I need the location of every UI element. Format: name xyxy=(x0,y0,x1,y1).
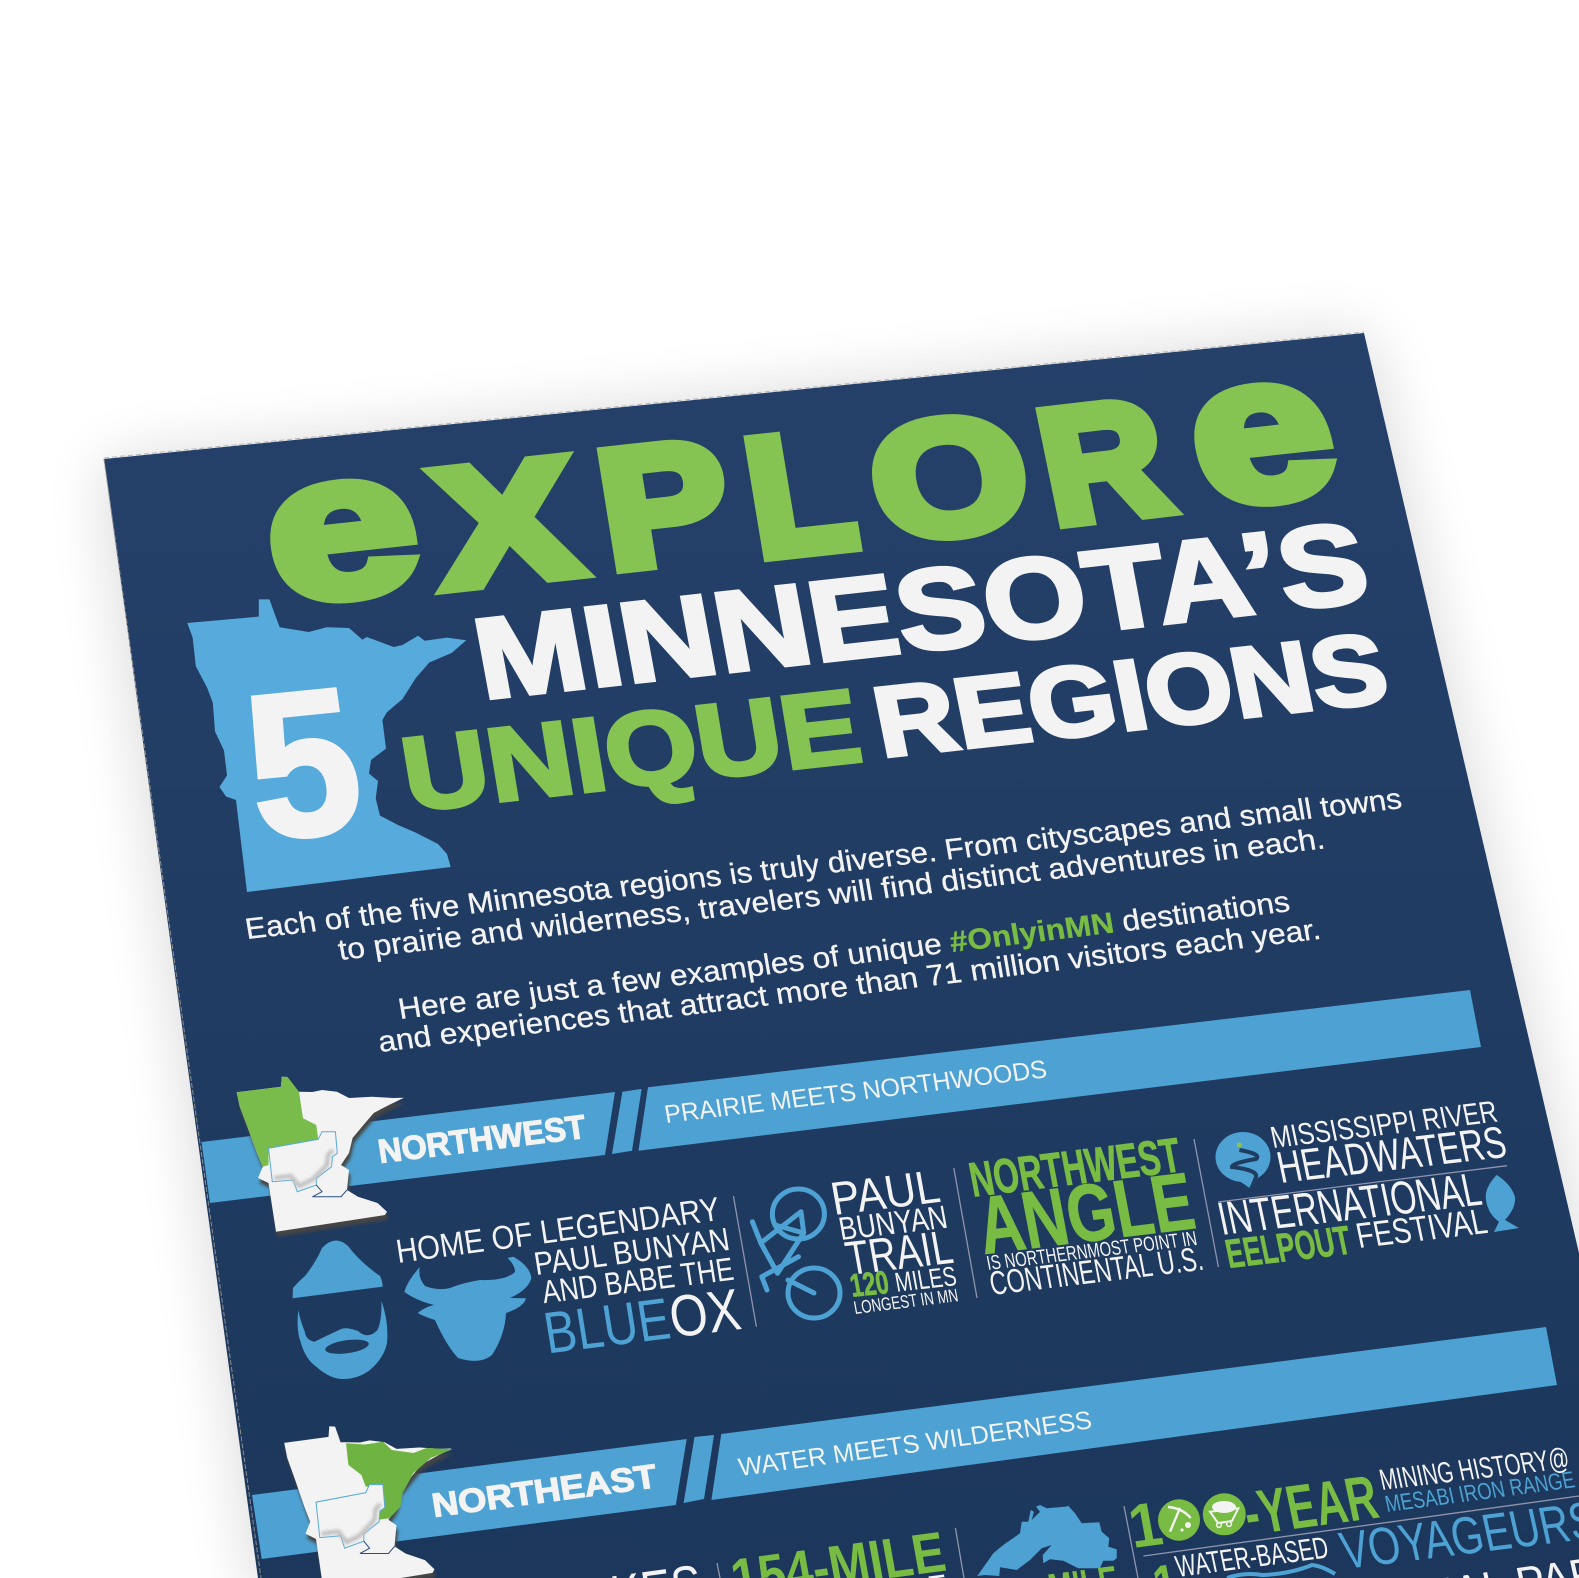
icon: bicycle xyxy=(752,1189,840,1318)
icon: Babe the blue ox xyxy=(404,1257,531,1361)
title: explore: e xyxy=(1166,307,1353,549)
text: 100-year xyxy=(1123,1463,1384,1562)
text: International Eelpout Festival: EELPOUT xyxy=(1221,1217,1355,1277)
text: 100-year: 1 xyxy=(1123,1490,1167,1562)
text: Paul Bunyan Trail xyxy=(827,1160,960,1318)
text: home of legendary Paul Bunyan: PAUL BUNYAN xyxy=(531,1221,732,1282)
text: International Eelpout Festival: INTERNATIONAL xyxy=(1213,1163,1486,1245)
band: northeast header xyxy=(252,1327,1557,1559)
subheading: water meets wilderness: WATER MEETS WILDERNESS xyxy=(736,1406,1094,1482)
number 5: 5 xyxy=(232,643,374,884)
text: Northwest Angle: IS NORTHERNMOST POINT IN xyxy=(985,1228,1199,1275)
intro text block xyxy=(243,782,1404,1059)
text: Mississippi River headwaters xyxy=(1267,1095,1511,1193)
text: Paul Bunyan Trail: 120 xyxy=(847,1264,892,1304)
heading: regions: REGIONS xyxy=(864,613,1396,779)
title: explore xyxy=(250,307,1353,647)
text: International Eelpout Festival: FESTIVAL xyxy=(1352,1201,1491,1256)
icon: northwest region map xyxy=(237,1077,406,1237)
icon: waves xyxy=(1227,1565,1335,1578)
text: Paul Bunyan Trail: PAUL xyxy=(827,1160,944,1225)
text: 100-year: -YEAR xyxy=(1238,1463,1384,1549)
intro text block: Here are just a few examples of unique #OnlyinMN destinations xyxy=(396,885,1292,1026)
text: home of legendary Paul Bunyan: OX xyxy=(665,1277,745,1350)
title: explore: e xyxy=(250,404,431,647)
poster page xyxy=(104,333,1579,1578)
text: Paul Bunyan Trail: BUNYAN xyxy=(836,1199,950,1247)
icon: northeast region map xyxy=(284,1426,453,1578)
text: Northwest Angle: NORTHWEST xyxy=(965,1128,1185,1208)
text: home of legendary Paul Bunyan: BLUE xyxy=(539,1286,675,1366)
text: home of legendary Paul Bunyan xyxy=(394,1191,745,1366)
text: home of legendary Paul Bunyan: HOME OF LEGENDARY xyxy=(394,1191,722,1271)
title: explore: O xyxy=(857,381,1042,576)
title: explore: L xyxy=(733,394,867,593)
text: Mississippi River headwaters: MISSISSIPPI RIVER xyxy=(1267,1095,1500,1155)
text: Northwest Angle: CONTINENTAL U.S. xyxy=(987,1241,1207,1303)
text: Northwest Angle: ANGLE xyxy=(970,1157,1201,1272)
icon: lumberjack Paul Bunyan xyxy=(293,1240,387,1379)
heading: northeast: NORTHEAST xyxy=(429,1458,660,1525)
text: Paul Bunyan Trail: MILES xyxy=(892,1260,959,1298)
intro text block: Each of the five Minnesota regions is truly diverse. From cityscapes and small towns xyxy=(243,782,1404,946)
heading: unique: UNIQUE xyxy=(394,668,869,834)
text: Mississippi River headwaters: HEADWATERS xyxy=(1273,1118,1511,1193)
text: International Eelpout Festival xyxy=(1213,1163,1491,1277)
intro text block: to prairie and wilderness, travelers will find distinct adventures in each. xyxy=(336,822,1327,967)
icon: Lake Superior xyxy=(977,1505,1117,1576)
icon: river headwaters xyxy=(1216,1132,1270,1189)
icon: mine cart circle xyxy=(1203,1493,1246,1535)
icon: fish xyxy=(1486,1175,1519,1232)
heading: Minnesota's: MINNESOTA’S xyxy=(464,499,1378,724)
title: explore: X xyxy=(423,422,589,624)
text: voyageurs national park xyxy=(1148,1491,1579,1578)
heading: northwest: NORTHWEST xyxy=(376,1109,588,1171)
text: Paul Bunyan Trail: TRAIL xyxy=(842,1221,957,1286)
text: Northwest Angle xyxy=(965,1128,1207,1303)
icon: pickaxe circle xyxy=(1158,1499,1200,1541)
icon: Minnesota state shape xyxy=(187,599,466,892)
title: explore: R xyxy=(1024,366,1182,559)
title: explore: P xyxy=(586,404,742,605)
band: northwest header xyxy=(202,990,1481,1203)
intro text block: and experiences that attract more than 71 million visitors each year. xyxy=(376,913,1323,1059)
text: Paul Bunyan Trail: LONGEST IN MN xyxy=(852,1285,960,1318)
subheading: prairie meets northwoods: PRAIRIE MEETS NORTHWOODS xyxy=(662,1055,1049,1129)
text: home of legendary Paul Bunyan: AND BABE THE xyxy=(539,1251,736,1310)
